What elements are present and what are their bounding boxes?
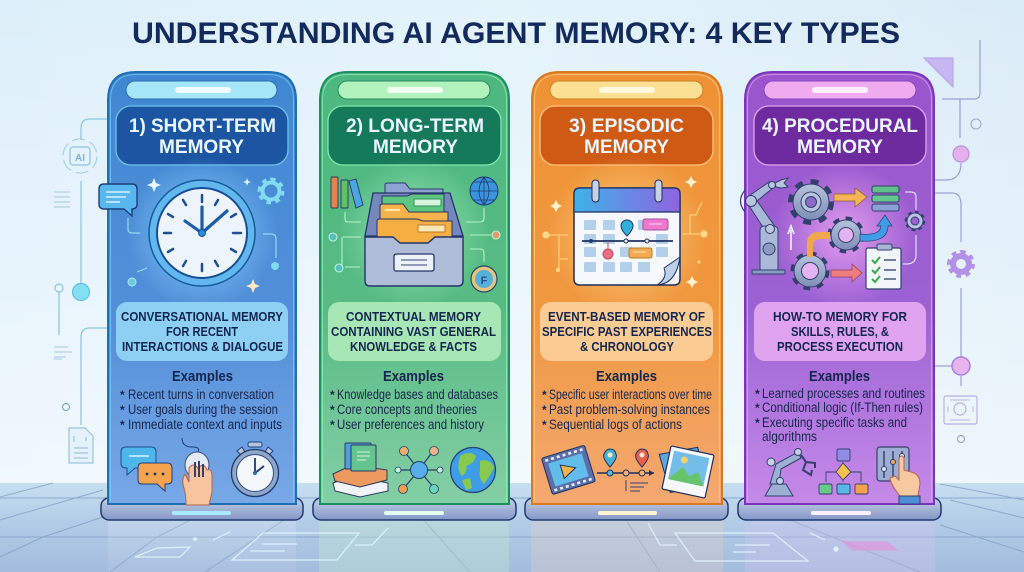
checklist [866, 248, 901, 289]
icon: film strip [541, 445, 596, 495]
decorations [542, 176, 708, 288]
panel 4 description: PROCESS EXECUTION [777, 339, 903, 354]
panel 1 description: INTERACTIONS & DIALOGUE [122, 339, 283, 354]
panel 1 examples: Recent turns in conversation [128, 387, 274, 402]
right circuit decoration [924, 40, 981, 442]
panel: long-term memory [313, 72, 516, 520]
lines [54, 192, 70, 207]
panel 1 heading [116, 106, 288, 165]
panel 3 examples: Examples [596, 369, 657, 385]
panel 3 examples: Sequential logs of actions [549, 417, 682, 432]
panel 2 description: CONTAINING VAST GENERAL [331, 324, 496, 339]
icon: file drawer [339, 158, 489, 308]
icon: photos [659, 446, 714, 498]
arrows [834, 188, 867, 207]
timeline pin [621, 220, 633, 236]
icon: gear [260, 180, 282, 202]
panel 1 description [116, 302, 288, 361]
panel 2 base [313, 498, 516, 520]
icon: AI chip [63, 139, 97, 173]
gear top [792, 183, 830, 221]
icon: network [395, 446, 443, 494]
panel: short-term memory [99, 72, 303, 520]
panel 3 heading: 3) EPISODIC [569, 116, 684, 137]
panel 3 examples: Specific user interactions over time [549, 387, 712, 402]
panel 4 examples: Learned processes and routines [762, 386, 925, 401]
icon: calendar [547, 155, 707, 315]
panel 1 examples: Immediate context and inputs [128, 417, 282, 432]
panel 2 examples: Core concepts and theories [337, 402, 477, 417]
icon: settings chip [944, 396, 977, 424]
panel 4 description: HOW-TO MEMORY FOR [773, 309, 908, 324]
panel 4 top bar [764, 81, 916, 99]
panel 4 examples: algorithms [762, 429, 817, 444]
panel 1 examples: Examples [172, 369, 233, 385]
panel 4 heading [754, 106, 926, 165]
gear middle [831, 220, 861, 250]
panel 1 top bar [126, 81, 277, 99]
panel 1 heading: MEMORY [159, 137, 244, 158]
icon: chat bubble [99, 184, 137, 216]
icon: globe [470, 177, 498, 205]
panel 4 heading: 4) PROCEDURAL [762, 116, 918, 137]
panel 2 body [320, 72, 509, 504]
icon: gear right [950, 254, 972, 274]
floor holograms [135, 523, 897, 561]
panel 1 description: FOR RECENT [166, 324, 238, 339]
panel 2 description: CONTEXTUAL MEMORY [346, 309, 481, 324]
panel 4 description: SKILLS, RULES, & [791, 324, 889, 339]
panel 3 heading [540, 106, 713, 165]
panel 4 examples [755, 369, 925, 444]
panel 4 body [745, 72, 934, 504]
stack [872, 186, 899, 193]
icon: book stack [333, 443, 388, 497]
panel 1 description: CONVERSATIONAL MEMORY [121, 309, 283, 324]
panel 1 examples: * [120, 388, 125, 402]
panel: procedural memory [738, 72, 941, 520]
icon: clock [126, 157, 278, 309]
icon: robot arm small [765, 448, 815, 496]
panel 2 description [328, 302, 501, 361]
panel 3 description: SPECIFIC PAST EXPERIENCES [542, 324, 712, 339]
panel 4 examples: Conditional logic (If-Then rules) [762, 400, 923, 415]
triangle [924, 58, 953, 87]
panel 1 examples: User goals during the session [128, 402, 278, 417]
panel 3 base [525, 498, 728, 520]
panel 1 examples: * [120, 403, 125, 417]
panel 4 examples: * [755, 387, 760, 401]
dashed arrow path [903, 192, 916, 264]
panel 3 description: & CHRONOLOGY [580, 339, 674, 354]
panel 4 examples: * [755, 401, 760, 415]
panel 1 body [108, 72, 296, 504]
panel 2 heading: MEMORY [373, 137, 458, 158]
panel 2 description: KNOWLEDGE & FACTS [350, 339, 477, 354]
icon: chat bubbles [121, 447, 172, 491]
icon: stopwatch [232, 442, 278, 496]
panel 3 heading: MEMORY [584, 137, 669, 158]
icon: flowchart [819, 449, 868, 494]
icon: data badge [471, 266, 497, 292]
floor [0, 483, 1024, 572]
panel 4 description [754, 302, 926, 361]
panel 3 examples: * [542, 403, 547, 417]
panel 3 examples: * [542, 388, 547, 402]
icon: document [69, 428, 93, 463]
node: large circle [72, 284, 90, 300]
panel 2 top bar [338, 81, 490, 99]
panel 1 heading: 1) SHORT-TERM [129, 116, 276, 137]
icon: data badge: F [481, 275, 488, 287]
panel 1 examples: * [120, 418, 125, 432]
icon: control panel and hand [877, 447, 920, 504]
icon: AI chip: AI [75, 153, 85, 164]
panel 4 examples: Examples [809, 369, 870, 385]
panel 3 examples: Past problem-solving instances [549, 402, 710, 417]
left circuit decoration [54, 119, 108, 463]
panel 3 body [532, 72, 722, 504]
panel 3 top bar [550, 81, 703, 99]
panel 1 base [101, 498, 303, 520]
panel 2 examples: Knowledge bases and databases [337, 387, 498, 402]
panel 1 examples [120, 369, 282, 432]
icon: process gears [773, 163, 923, 307]
icon: earth [450, 448, 496, 492]
sparkles and connectors [128, 178, 279, 293]
panel 2 examples: Examples [383, 369, 444, 385]
title: UNDERSTANDING AI AGENT MEMORY: 4 KEY TYPES [132, 17, 900, 50]
panel 4 examples: * [755, 416, 760, 430]
panel 2 heading [328, 106, 501, 165]
panel 3 description: EVENT-BASED MEMORY OF [548, 309, 705, 324]
panel 3 description [540, 302, 713, 361]
panel 4 base [738, 498, 941, 520]
panel 2 heading: 2) LONG-TERM [346, 116, 484, 137]
icon: books [331, 177, 363, 208]
panel 2 examples: User preferences and history [337, 417, 484, 432]
panel 2 examples: * [330, 403, 335, 417]
panel 2 examples [330, 369, 498, 432]
icon: timeline with pins [597, 449, 654, 491]
icon: hand on mouse [182, 438, 212, 505]
panel: episodic memory [525, 72, 728, 520]
icon: robot arm [740, 178, 788, 274]
node: small circle [55, 284, 63, 292]
panel 4 heading: MEMORY [797, 137, 883, 158]
panel 2 examples: * [330, 388, 335, 402]
panel 3 examples [542, 369, 712, 432]
panel 2 examples: * [330, 418, 335, 432]
gear bottom [794, 255, 826, 287]
node: top purple [953, 146, 969, 162]
panel 4 examples: Executing specific tasks and [762, 415, 907, 430]
panel 3 examples: * [542, 418, 547, 432]
gear small [907, 213, 923, 229]
connectors [329, 208, 500, 272]
